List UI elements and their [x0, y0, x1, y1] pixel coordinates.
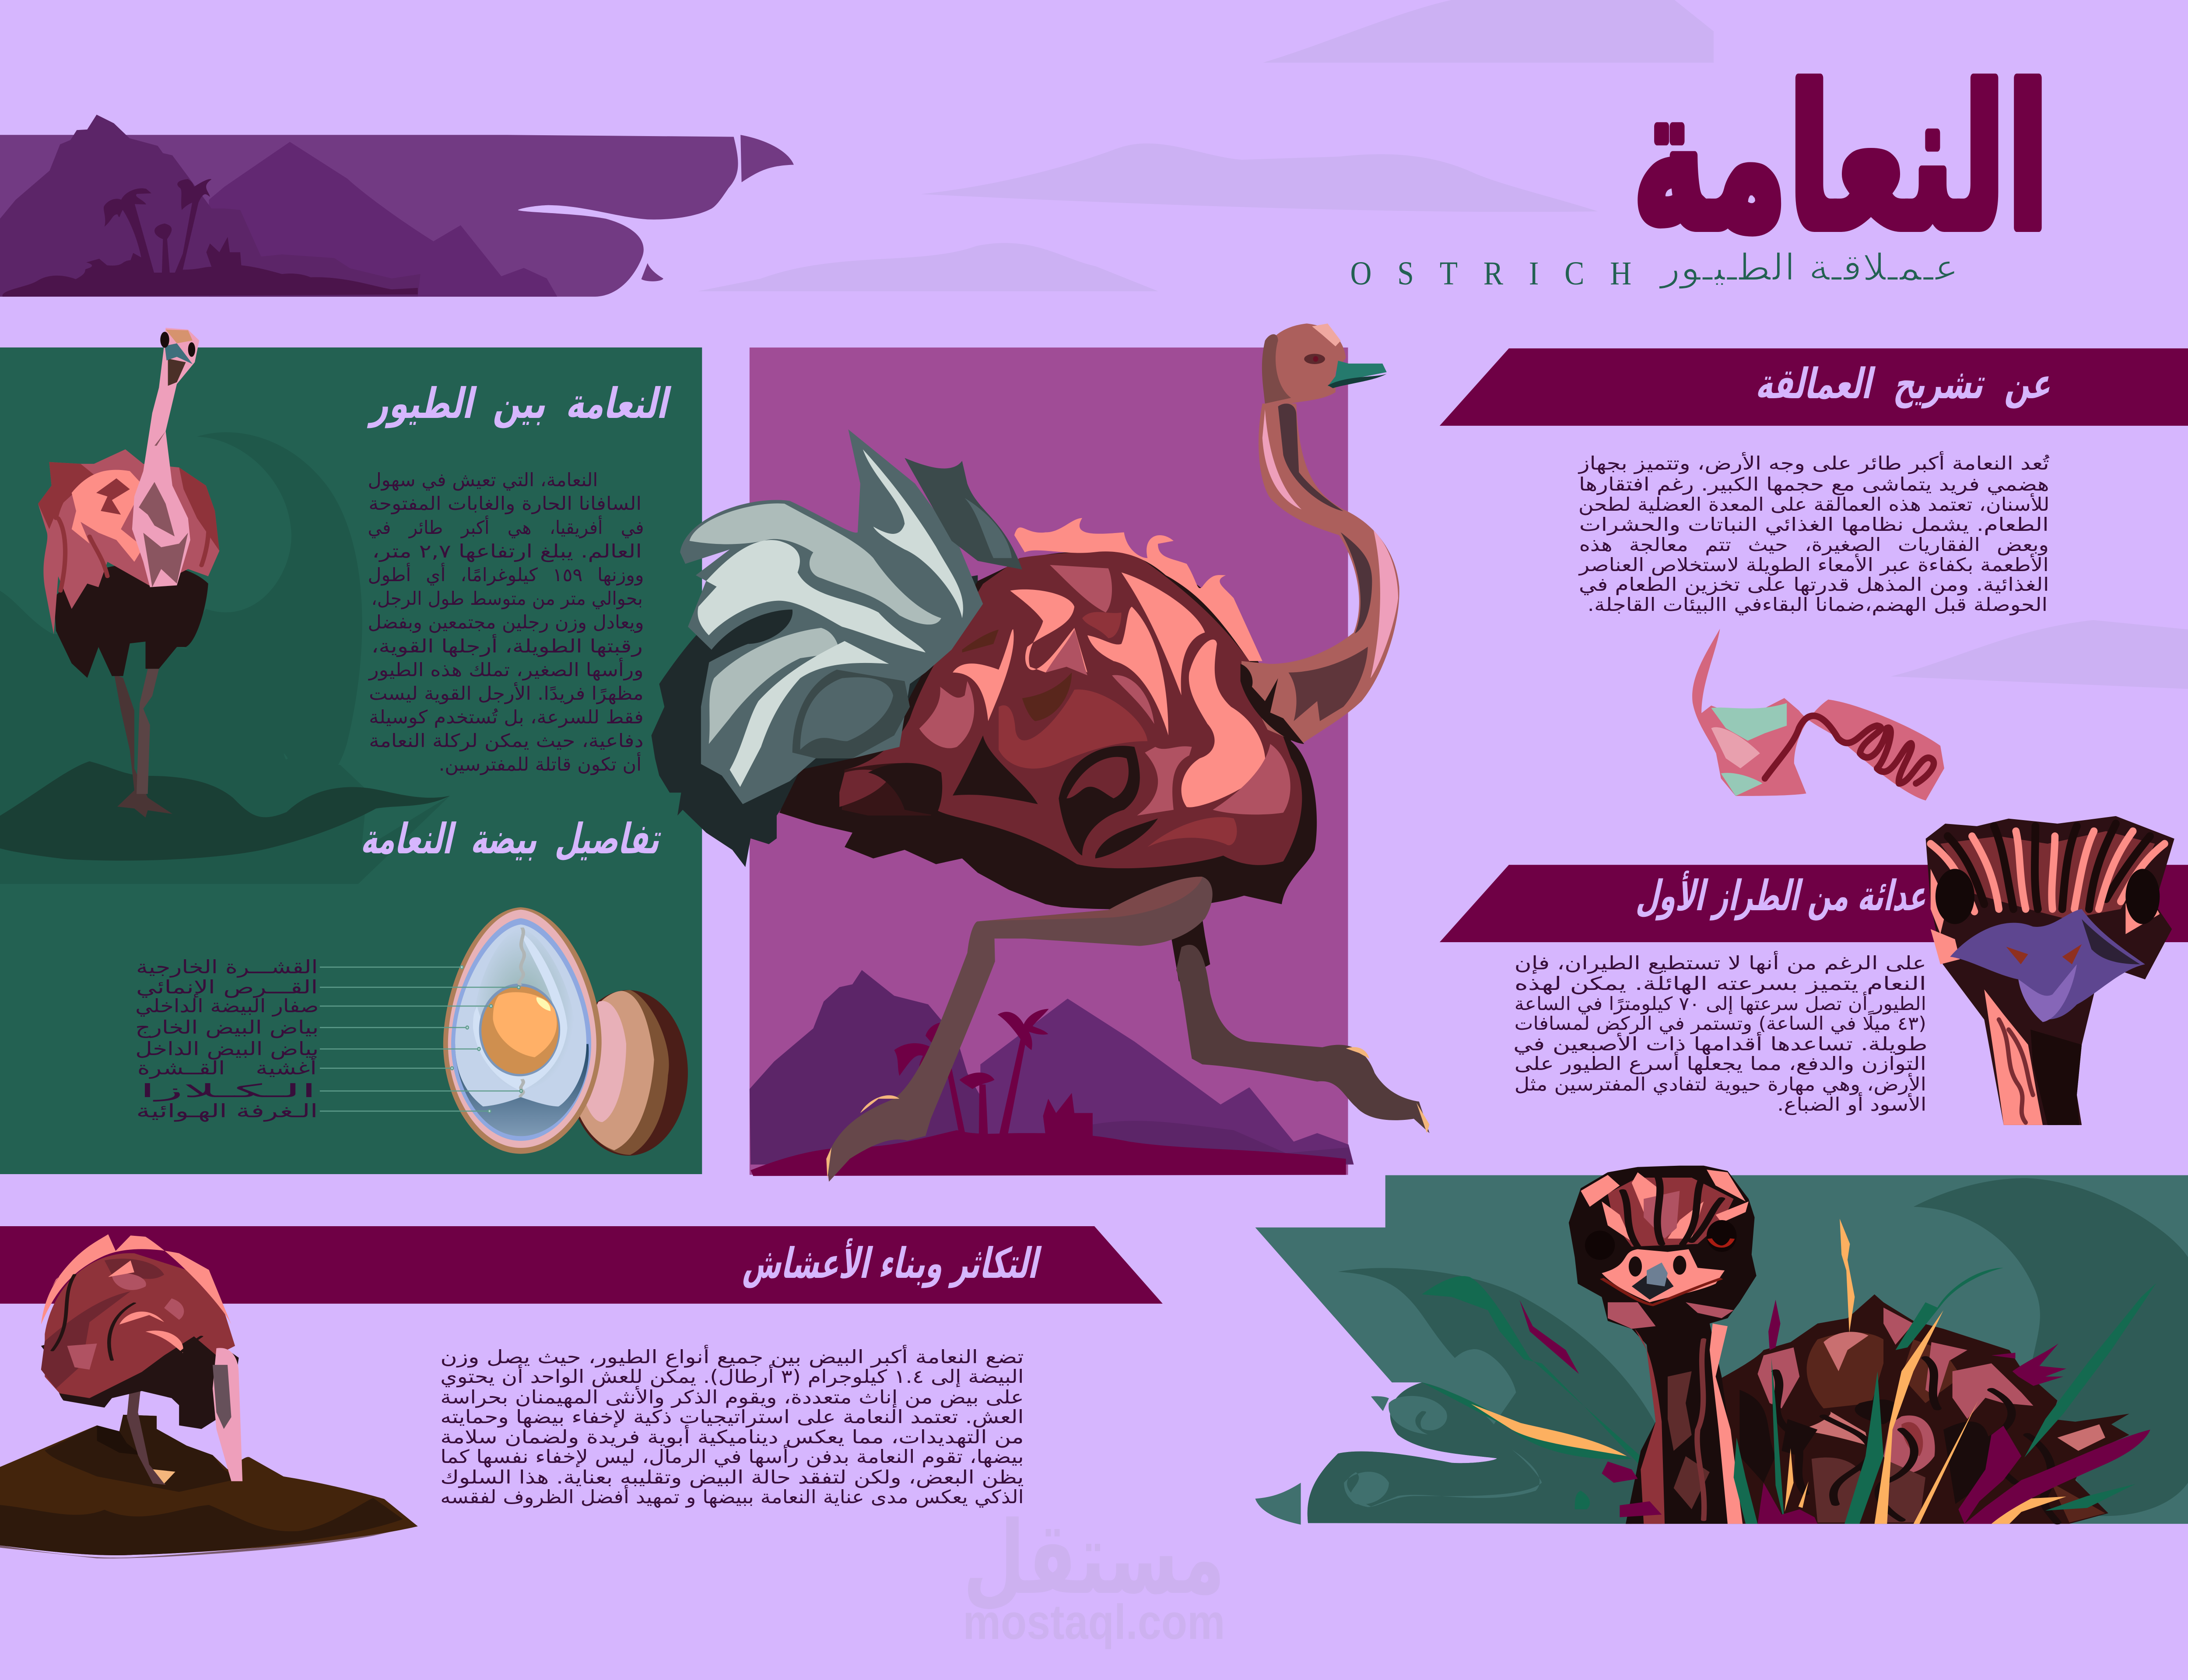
egg diagram labels: صفار البيضة الداخلي [135, 996, 319, 1017]
text block: speed: على الرغم من أنها لا تستطيع الطيران، فإن [1515, 951, 1926, 974]
background clouds [698, 0, 2188, 689]
illustration: ostrich on mound [0, 1235, 418, 1558]
text block: reproduction: البيضة إلى ١.٤ كيلوجرام (٣ أرطال). يمكن للعش الواحد أن يحتوي [440, 1364, 1024, 1388]
banner: reproduction [0, 1226, 1163, 1304]
text block: ostrich among birds: أن تكون قاتلة للمفترسين. [439, 752, 642, 775]
front leg [826, 877, 1213, 1182]
text block: speed: الأرض، وهي مهارة حيوية لتفادي المفترسين مثل [1515, 1073, 1926, 1095]
egg diagram labels: الـغرفة الهـوائية [136, 1101, 318, 1122]
text block: reproduction: تضع النعامة أكبر البيض بين جميع أنواع الطيور، حيث يصل وزن [440, 1345, 1024, 1368]
text block: ostrich among birds: السافانا الحارة والغابات المفتوحة [368, 493, 642, 515]
heading: speed: عدائة من الطراز الأول [1633, 870, 1934, 921]
panel background shapes [0, 432, 450, 884]
icon: palm trees [894, 1009, 1093, 1142]
text block: ostrich among birds: النعامة، التي تعيش في سهول [368, 470, 598, 491]
egg illustration [443, 907, 688, 1156]
text block: anatomy: الغذائية. ومن المذهل قدرتها على تخزين الطعام في [1579, 574, 2049, 596]
egg diagram labels: القـــرص الإنمائي [136, 977, 318, 998]
top-left mountain banner [0, 115, 794, 297]
text block: anatomy: تُعد النعامة أكبر طائر على وجه الأرض، وتتميز بجهاز [1578, 451, 2050, 474]
text block: ostrich among birds: ورأسها الصغير، تملك هذه الطيور [368, 658, 644, 681]
text block: reproduction: على بيض من إناث متعددة، ويقوم الذكر والأنثى المهيمنان بحراسة [440, 1386, 1024, 1408]
illustration: standing ostrich [38, 328, 219, 817]
watermark [963, 1500, 1225, 1649]
panel: ostrich among birds (green) [0, 347, 702, 1174]
text block: ostrich among birds [368, 470, 644, 775]
text block: anatomy: الأطعمة بكفاءة عبر الأمعاء الطويلة لاستخلاص العناصر [1578, 554, 2049, 576]
text block: anatomy: الطعام. يشمل نظامها الغذائي النباتات والحشرات [1579, 514, 2049, 536]
body [779, 552, 1317, 909]
subtitle arabic: عـمـلاقـة الطـيـور [1659, 246, 1959, 289]
text block: ostrich among birds: رقبتها الطويلة، أرجلها القوية، [371, 634, 643, 657]
text block: ostrich among birds: العالم. يبلغ ارتفاعها ٢,٧ متر، [372, 541, 642, 562]
text block: anatomy [1578, 451, 2050, 616]
heading: anatomy: عن تشريح العمالقة [1753, 359, 2058, 409]
text block: ostrich among birds: في أفريقيا، هي أكبر طائر في [368, 516, 644, 539]
text block: anatomy: هضمي فريد يتماشى مع حجمها الكبير. رغم افتقارها [1579, 474, 2049, 495]
illustration: ostrich in nest [1471, 1166, 2156, 1524]
illustration: digestive system [1692, 629, 1944, 800]
panel: nesting scene [1255, 1175, 2188, 1525]
egg diagram labels [135, 957, 319, 1122]
panel: purple with mountains [750, 347, 1354, 1176]
text block: anatomy: للأسنان، تعتمد هذه العمالقة على المعدة العضلية لطحن [1578, 493, 2050, 516]
text block: ostrich among birds: ووزنها ١٥٩ كيلوغرامًا، أي أطول [368, 563, 644, 586]
text block: ostrich among birds: دفاعية، حيث يمكن لركلة النعامة [369, 730, 644, 752]
text block: speed: التوازن والدفع، مما يجعلها أسرع الطيور على [1515, 1052, 1926, 1075]
head [1569, 1166, 1757, 1329]
text block: speed: الطيور أن تصل سرعتها إلى ٧٠ كيلومترًا في الساعة [1515, 992, 1926, 1015]
rear leg [1171, 919, 1430, 1133]
egg label leader lines [320, 965, 522, 1112]
tail plumage [651, 575, 978, 867]
illustration: running ostrich [651, 323, 1430, 1182]
plants [1471, 1219, 2156, 1524]
heading: reproduction: التكاثر وبناء الأعشاش [740, 1238, 1046, 1288]
text block: anatomy: وبعض الفقاريات الصغيرة، حيث تتم معالجة هذه [1579, 534, 2049, 556]
text block: reproduction: يظن البعض، ولكن لتفقد حالة البيض وتقليبه بعناية. هذا السلوك [440, 1467, 1024, 1488]
text block: ostrich among birds: ويعادل وزن رجلين مجتمعين وبفضل [368, 612, 644, 633]
text block: speed [1513, 951, 1928, 1115]
banners: anatomy and speed [1440, 348, 2188, 942]
egg diagram labels: بياض البيض الخارج [135, 1017, 319, 1039]
wing feathers [680, 429, 1022, 804]
egg diagram labels: أغشية القــشرة [137, 1056, 317, 1079]
egg diagram labels: الـكـلازا [140, 1080, 317, 1102]
text block: ostrich among birds: فقط للسرعة، بل تُستخدم كوسيلة [369, 707, 644, 728]
neck [1608, 1321, 1743, 1524]
neck and head [1241, 323, 1399, 744]
text block: reproduction: الذكي يعكس مدى عناية النعامة ببيضها و تمهيد أفضل الظروف لفقسه [440, 1485, 1024, 1508]
subtitle english: OSTRICH [1350, 255, 1631, 292]
text block: anatomy: الحوصلة قبل الهضم،ضمانا البقاءفي االبيئات القاجلة. [1587, 594, 2048, 616]
heading: egg details: تفاصيل بيضة النعامة [358, 814, 667, 863]
watermark: mostaql.com [963, 1595, 1225, 1649]
text block: speed: الأسود أو الضباع. [1777, 1092, 1926, 1115]
text block: reproduction [440, 1345, 1024, 1508]
text block: reproduction: العش. تعتمد النعامة على استراتيجيات ذكية لإخفاء بيضها وحمايته [440, 1406, 1024, 1428]
egg diagram labels: بياض البيض الداخل [135, 1038, 319, 1060]
text block: speed: النعام يتميز بسرعته الهائلة. يمكن لهذه [1515, 973, 1926, 995]
text block: ostrich among birds: بحوالي متر من متوسط طول الرجل، [371, 588, 643, 610]
illustration: ostrich head close-up [1926, 816, 2174, 1125]
text block: ostrich among birds: مظهرًا فريدًا. الأرجل القوية ليست [369, 682, 644, 705]
text block: speed: (٤٣ ميلًا في الساعة) وتستمر في الركض لمسافات [1515, 1010, 1926, 1035]
text block: reproduction: من التهديدات، مما يعكس ديناميكية أبوية فريدة ولضمان سلامة [440, 1425, 1024, 1448]
egg diagram labels: القشـــرة الخارجية [136, 957, 318, 978]
heading: ostrich among birds: النعامة بين الطيور [367, 379, 676, 428]
watermark: مستقل [963, 1500, 1225, 1617]
text block: speed: طويلة. تساعدها أقدامها ذات الأصبعين في [1513, 1032, 1928, 1055]
text block: reproduction: بيضها، تقوم النعامة بدفن رأسها في الرمال، ليس لإخفاء نفسها كما [440, 1445, 1024, 1468]
